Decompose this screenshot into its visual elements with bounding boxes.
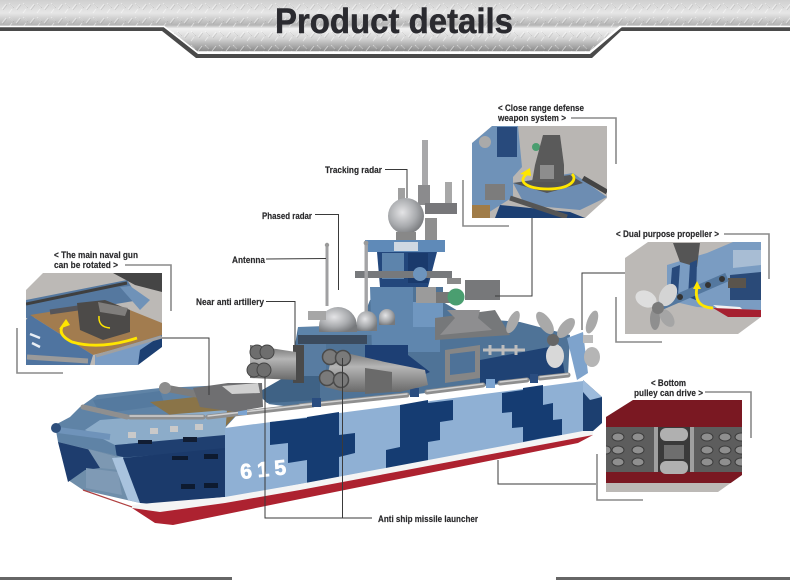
- title: Product details: [275, 2, 513, 41]
- ship: missile launchers: [247, 345, 428, 394]
- ship: tower and radar: [355, 140, 457, 303]
- callout text: < Dual purpose propeller >: [616, 229, 719, 239]
- bottom strip left: [0, 577, 232, 580]
- label: antenna: [232, 255, 326, 265]
- callout: close range defense weapon system: weapon system >: [497, 113, 566, 123]
- ship model: [51, 140, 602, 525]
- callout text: < Bottom: [651, 378, 686, 388]
- callout text: < Close range defense: [498, 103, 584, 113]
- yellow rotation arrow: [59, 316, 137, 345]
- ship: hull: [58, 380, 602, 525]
- hull number: 615: [239, 456, 288, 484]
- label: antenna: Antenna: [232, 255, 266, 265]
- inset photo: main gun rotation: [26, 273, 162, 365]
- callout: bottom pulley: pulley can drive >: [634, 388, 703, 398]
- label: tracking radar: Tracking radar: [325, 165, 382, 175]
- bottom strip right: [556, 577, 790, 580]
- label: anti ship missile launcher: Anti ship missile launcher: [378, 514, 478, 524]
- ship: main gun: [159, 382, 263, 412]
- ship: superstructure: [257, 287, 570, 408]
- label: phased radar: [262, 211, 338, 290]
- callout: dual purpose propeller: [582, 229, 769, 342]
- header banner: [0, 0, 790, 58]
- yellow arrow: [693, 281, 713, 308]
- callout text: < The main naval gun: [54, 250, 138, 260]
- ship: antennas and domes: [308, 241, 395, 332]
- label: near anti artillery: Near anti artillery: [196, 297, 264, 307]
- label: anti ship missile launcher: [265, 358, 478, 524]
- inset photo: pulley: [601, 400, 747, 492]
- ship: gun and green radar: [436, 278, 500, 335]
- callout: main naval gun: [17, 250, 209, 395]
- label: phased radar: Phased radar: [262, 211, 312, 221]
- ship: rails: [51, 374, 568, 437]
- label: near anti artillery: [196, 297, 295, 345]
- label: tracking radar: [325, 165, 407, 198]
- inset photo: close range weapon: [472, 126, 607, 218]
- callout: close range defense weapon system: [463, 103, 616, 296]
- ship: deck: [55, 385, 257, 459]
- inset photo: propeller: [625, 242, 761, 334]
- callout: bottom pulley: [498, 378, 751, 500]
- callout: main naval gun: can be rotated >: [54, 260, 118, 270]
- yellow rotation arrow: [520, 168, 574, 189]
- ship: propellers: [503, 309, 601, 380]
